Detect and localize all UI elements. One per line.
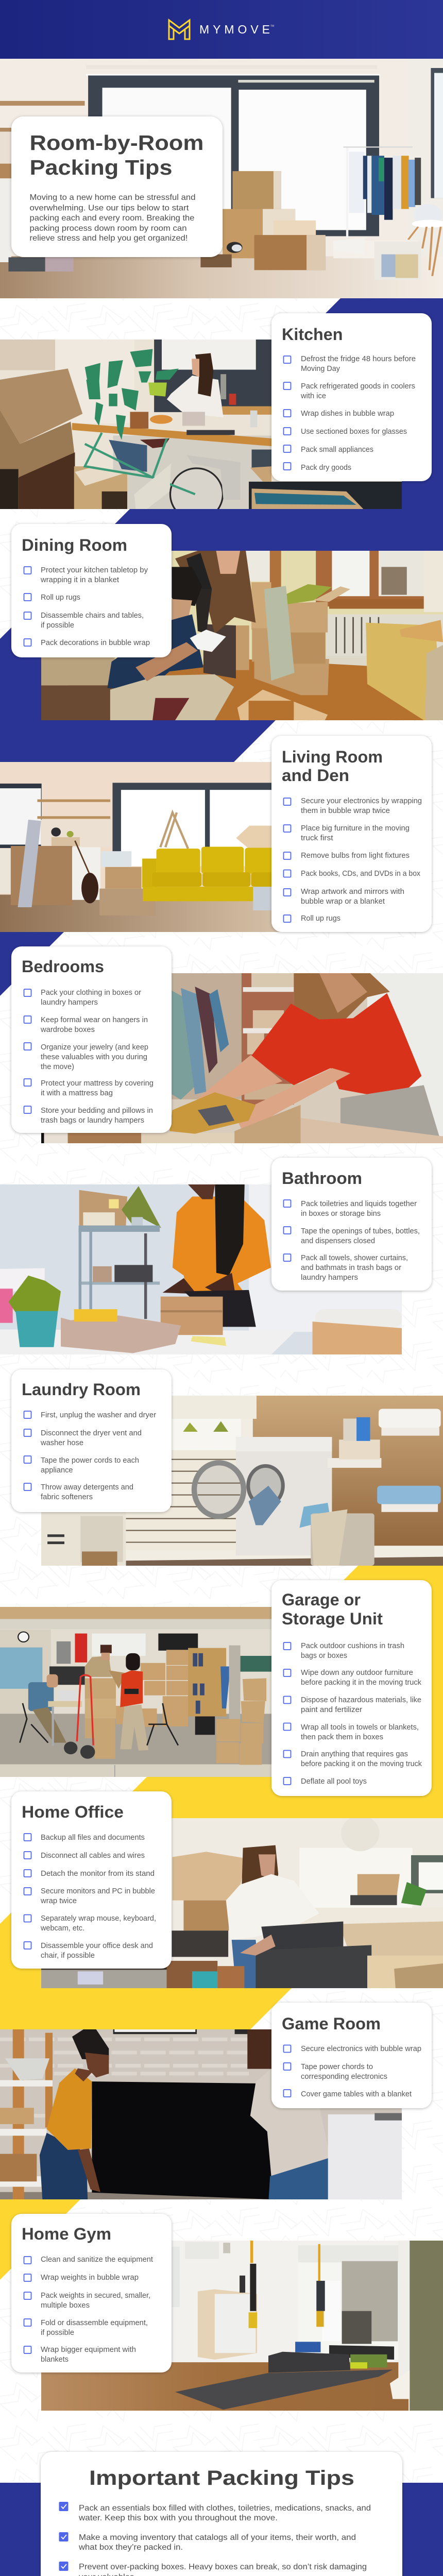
checklist item: if possible [41,621,74,630]
checklist item: laundry hampers [41,998,98,1007]
panel: important packing tips [41,2452,402,2576]
checked item: what box they’re packed in. [78,2543,183,2552]
checklist item: Wrap dishes in bubble wrap [301,410,394,418]
checked item: Pack an essentials box filled with clothes, toiletries, medications, snacks, and [79,2504,371,2513]
blue diagonal band [0,298,443,996]
checklist item: Protect your kitchen tabletop by [41,566,148,574]
panel: bathroom [271,1158,432,1291]
checklist item [24,566,148,584]
checklist item [283,1200,417,1218]
checklist item [24,1106,153,1125]
panel: living room and den [271,736,432,932]
checklist item: multiple boxes [41,2301,90,2310]
heading: garage or storage unit: Garage or [282,1590,361,1609]
checklist item: before packing it on the moving truck [301,1760,422,1768]
checklist item: bubble wrap or a blanket [301,897,385,906]
checklist item [24,2346,136,2364]
checklist item: Roll up rugs [41,594,80,602]
checked item [59,2502,371,2522]
panel: garage or storage unit [271,1580,432,1796]
brand name: MYMOVE [199,23,270,36]
checklist item: Wrap artwork and mirrors with [301,888,404,896]
checklist item: chair, if possible [41,1952,95,1960]
checklist item [24,989,141,1007]
checklist item: Roll up rugs [301,914,340,923]
checked item: Make a moving inventory that catalogs all of your items, their worth, and [79,2533,356,2542]
heading: bedrooms: Bedrooms [22,957,104,976]
heading: bathroom: Bathroom [282,1169,362,1188]
checklist item: truck first [301,834,333,842]
panel: dining room [11,524,172,657]
checklist item: Wrap all tools in towels or blankets, [301,1723,419,1732]
checked item: Prevent over-packing boxes. Heavy boxes can break, so don’t risk damaging [79,2563,367,2571]
photo: home gym with straps and floor mat [41,2241,443,2411]
photo: woman in orange sweater packing a box [0,1184,402,1354]
heading: home gym: Home Gym [22,2225,111,2243]
checklist item: it with a mattress bag [41,1089,113,1097]
checklist item: Store your bedding and pillows in [41,1107,153,1115]
checklist item: Pack decorations in bubble wrap [41,639,150,647]
checklist item: Keep formal wear on hangers in [41,1016,148,1024]
checklist item [283,824,410,842]
checklist item: Wrap weights in bubble wrap [41,2274,139,2282]
heading: home office: Home Office [22,1803,124,1821]
checklist item: the move) [41,1063,74,1071]
checklist item: Throw away detergents and [41,1483,133,1492]
heading: garage or storage unit [282,1590,383,1628]
photo: garage with boxes and people [0,1607,271,1777]
photo: laundry room with washer [41,1396,443,1566]
checked item [59,2562,367,2576]
checklist item: and bathmats in trash bags or [301,1264,401,1272]
intro text: overwhelming. Use our tips below to start [30,204,189,212]
title: Packing Tips [30,156,172,179]
trademark: TM [270,25,274,28]
checklist item: Tape the power cords to each [41,1456,139,1465]
checklist item: Wrap bigger equipment with [41,2346,136,2354]
intro text: packing each and every room. Breaking the [30,214,195,223]
checked item [59,2532,356,2552]
checklist item: Detach the monitor from its stand [41,1870,155,1878]
checklist item: blankets [41,2355,69,2364]
intro text: relieve stress and help you get organized! [30,234,188,243]
yellow diagonal band [0,1566,443,2280]
heading: kitchen: Kitchen [282,325,343,344]
checklist item: corresponding electronics [301,2073,387,2081]
checklist item: Secure monitors and PC in bubble [41,1887,155,1895]
checklist item: Pack weights in secured, smaller, [41,2292,150,2300]
checklist item: First, unplug the washer and dryer [41,1411,156,1419]
checklist item [283,2063,387,2081]
checklist item: Place big furniture in the moving [301,824,410,833]
checklist item: before packing it in the moving truck [301,1679,422,1687]
checklist item: wrap twice [40,1897,77,1905]
checklist item [24,1887,155,1905]
checklist item [283,797,422,815]
checklist item: Dispose of hazardous materials, like [301,1696,421,1704]
checklist item: trash bags or laundry hampers [41,1116,144,1125]
checklist item: Disassemble your office desk and [41,1942,153,1950]
checklist item: Clean and sanitize the equipment [41,2256,153,2264]
checklist item: webcam, etc. [40,1924,84,1933]
checklist item [24,1079,154,1097]
checklist item: Secure your electronics by wrapping [301,797,422,805]
header bar [0,0,443,59]
checked item: water. Keep this box with you throughout the move. [78,2514,278,2522]
checklist item [283,382,415,400]
checklist item: in boxes or storage bins [301,1210,381,1218]
checklist item [24,1016,148,1034]
checklist item: Pack all towels, shower curtains, [301,1254,408,1262]
checklist item: bags or boxes [301,1652,347,1660]
checklist item: Disconnect the dryer vent and [41,1429,142,1437]
panel: home office [11,1791,172,1969]
checklist item [283,1750,422,1768]
checklist item: Disconnect all cables and wires [41,1852,145,1860]
checklist item [283,1227,420,1245]
checklist item [283,1669,422,1687]
checklist item: Fold or disassemble equipment, [41,2319,148,2327]
panel: laundry room [11,1369,172,1512]
intro text [30,193,196,243]
heading: dining room: Dining Room [22,536,127,554]
photo: empty room with moving boxes and clothes rack [0,59,443,298]
checklist item [283,914,340,923]
heading: garage or storage unit: Storage Unit [282,1609,383,1628]
checklist item: Pack books, CDs, and DVDs in a box [301,870,421,878]
heading: important packing tips: Important Packing Tips [89,2467,354,2489]
checklist item: Moving Day [301,365,340,373]
checklist item: Deflate all pool toys [301,1777,367,1786]
checklist item: Drain anything that requires gas [301,1750,408,1758]
checklist item: Organize your jewelry (and keep [41,1043,148,1052]
checklist item: Use sectioned boxes for glasses [301,428,407,436]
checklist item [24,1043,148,1071]
checklist item: Secure electronics with bubble wrap [301,2045,421,2053]
photo: couple packing in a dining room [41,551,443,720]
checklist item: appliance [41,1466,73,1475]
photo: woman packing in a kitchen with plant and bicycle [0,340,402,509]
title: Room-by-Room [30,131,204,155]
panel: kitchen [271,313,432,481]
checklist item: Pack toiletries and liquids together [301,1200,417,1208]
checklist item: laundry hampers [301,1274,358,1282]
title [30,131,204,179]
checklist item [24,1429,142,1447]
checklist item: Protect your mattress by covering [41,1079,154,1088]
checklist item: Remove bulbs from light fixtures [301,852,410,860]
checklist item [24,1914,156,1933]
checklist item [283,1642,404,1660]
checklist item: paint and fertilizer [301,1706,362,1714]
checklist item: Pack small appliances [301,446,373,454]
checklist item [283,1723,419,1741]
heading: game room: Game Room [282,2014,381,2033]
checklist item [24,1483,133,1501]
checklist item: Cover game tables with a blanket [301,2090,412,2098]
important tips blue band [0,2483,443,2576]
photo: living room with yellow sofa [0,762,281,932]
checklist item [24,1942,153,1960]
checklist item: Tape the openings of tubes, bottles, [301,1227,420,1235]
checklist item [24,2319,148,2337]
checklist item: Backup all files and documents [41,1834,145,1842]
checklist item: fabric softeners [41,1493,93,1501]
panel: intro [11,116,223,257]
panel: game room [271,2003,432,2108]
heading: living room and den [282,748,383,785]
checklist item: these valuables with you during [41,1053,147,1061]
checklist item: Pack your clothing in boxes or [41,989,141,997]
heading: living room and den: and Den [282,766,349,785]
checklist item: wardrobe boxes [40,1026,95,1034]
checklist item: them in bubble wrap twice [301,807,390,815]
checklist item [24,612,144,630]
heading: laundry room: Laundry Room [22,1380,141,1399]
checklist item: then pack them in boxes [301,1733,383,1741]
checklist item: and dispensers closed [301,1237,375,1245]
checklist item: Pack outdoor cushions in trash [301,1642,404,1650]
logo: MyMove [169,20,274,39]
panel: home gym [11,2214,172,2372]
checklist item: Pack refrigerated goods in coolers [301,382,415,391]
checklist item [283,888,404,906]
checklist item: with ice [300,392,326,400]
checklist item: if possible [41,2329,74,2337]
checklist item [283,355,416,373]
checklist item [24,1456,139,1475]
photo: woman packing a printer in a home office [41,1818,443,1988]
checklist item: wrapping it in a blanket [40,576,119,584]
checklist item: washer hose [40,1439,83,1447]
heading: living room and den: Living Room [282,748,383,766]
checklist item [283,1254,408,1282]
intro text: Moving to a new home can be stressful and [30,193,196,202]
checklist item: Disassemble chairs and tables, [41,612,144,620]
checklist item [283,1696,421,1714]
checklist item [24,2292,150,2310]
intro text: packing process down room by room can [30,224,186,233]
checklist item [283,463,351,472]
checklist item: Tape power chords to [301,2063,373,2071]
photo: couple carrying a large television [0,2029,402,2199]
photo: woman in red top packing clothes [41,973,443,1143]
icon: M mark [169,20,190,39]
checklist item: Defrost the fridge 48 hours before [301,355,416,363]
checklist item: Separately wrap mouse, keyboard, [41,1914,156,1923]
checklist item: Pack dry goods [301,464,351,472]
checklist item: Wipe down any outdoor furniture [301,1669,413,1677]
panel: bedrooms [11,946,172,1133]
